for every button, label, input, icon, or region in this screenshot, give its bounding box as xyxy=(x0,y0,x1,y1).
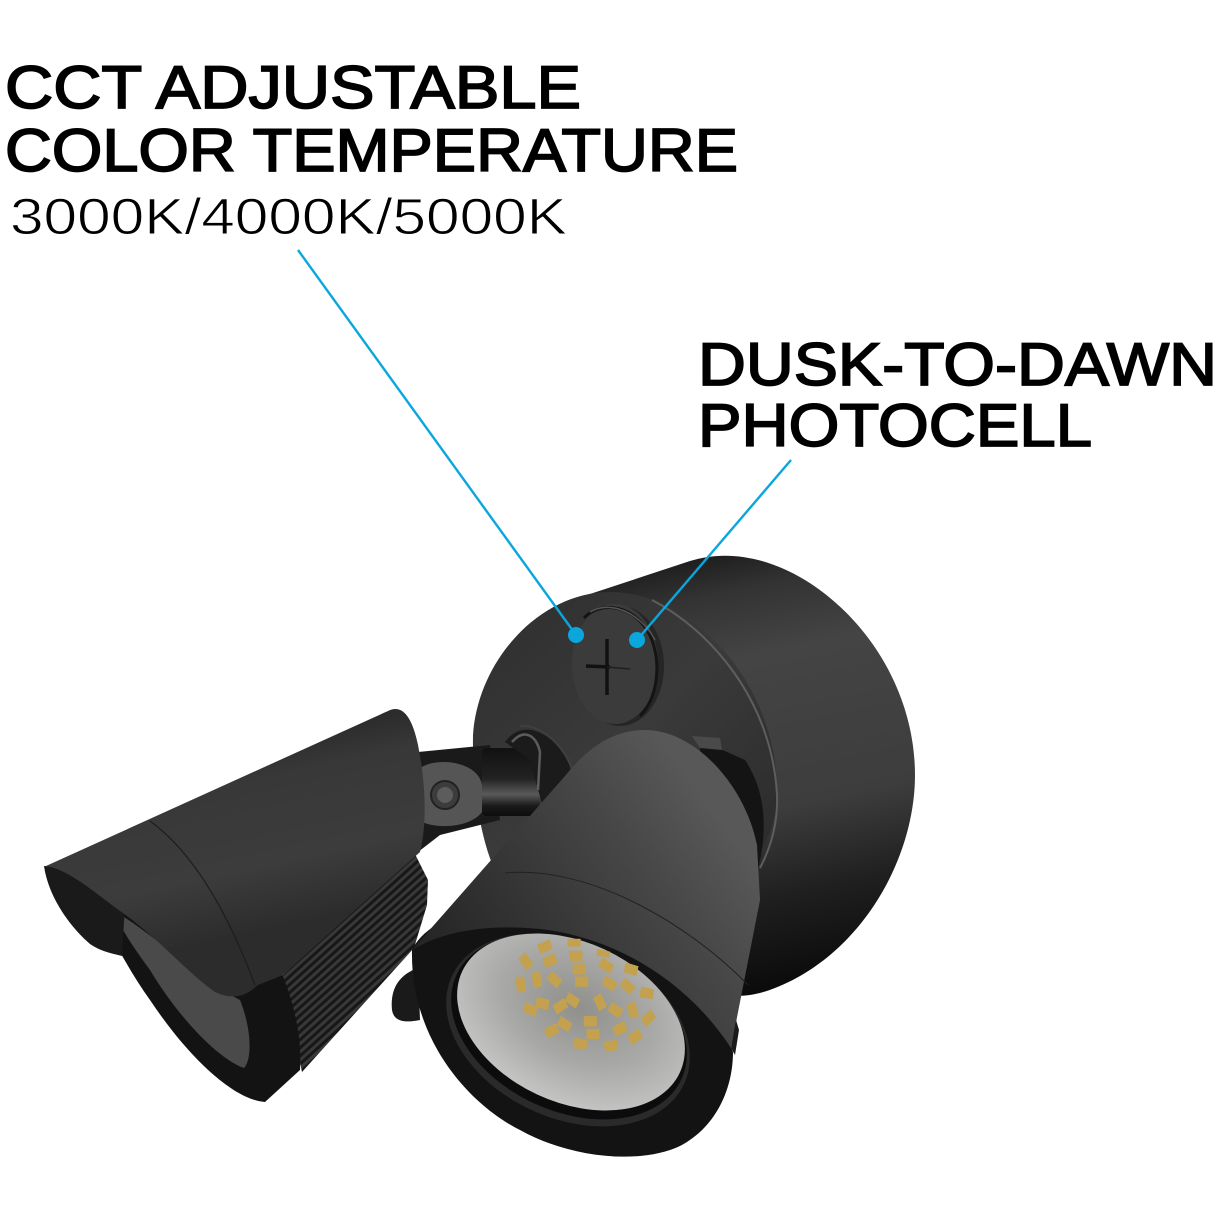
rear lamp xyxy=(44,709,428,1102)
callout: photocell leader line xyxy=(629,460,791,648)
swivel arm xyxy=(418,726,572,852)
rear bezel xyxy=(85,880,300,1102)
shadow behind front lamp xyxy=(700,740,764,880)
title: CCT adjustable color temperature xyxy=(5,54,738,184)
callout: CCT leader line xyxy=(298,250,584,643)
rear housing cylinder xyxy=(590,556,915,996)
rear lens xyxy=(112,910,250,1068)
mounting plate xyxy=(473,592,777,880)
heading: dusk-to-dawn photocell: DUSK-TO-DAWN xyxy=(698,331,1216,398)
photocell button xyxy=(572,604,664,726)
heading: dusk-to-dawn photocell: PHOTOCELL xyxy=(698,392,1092,459)
icon: cross slot xyxy=(586,639,610,695)
bezel xyxy=(412,909,733,1157)
LED array xyxy=(515,939,656,1052)
bracket xyxy=(418,762,482,826)
front lamp xyxy=(392,730,760,1164)
text: kelvin values: 3000K/4000K/5000K xyxy=(10,188,567,245)
title: CCT adjustable color temperature: CCT ADJUSTABLE xyxy=(5,54,581,121)
cone body xyxy=(412,730,760,1048)
cylinder xyxy=(482,748,540,816)
fins xyxy=(282,852,428,1072)
hood flap xyxy=(44,866,125,956)
inner ring xyxy=(415,896,721,1164)
lens disc xyxy=(428,899,714,1145)
hood body xyxy=(46,709,425,996)
left flap xyxy=(392,968,420,1021)
heading: dusk-to-dawn photocell xyxy=(698,331,1216,459)
title: CCT adjustable color temperature: COLOR TEMPERATURE xyxy=(5,117,738,184)
product: floodlight fixture xyxy=(44,556,915,1164)
